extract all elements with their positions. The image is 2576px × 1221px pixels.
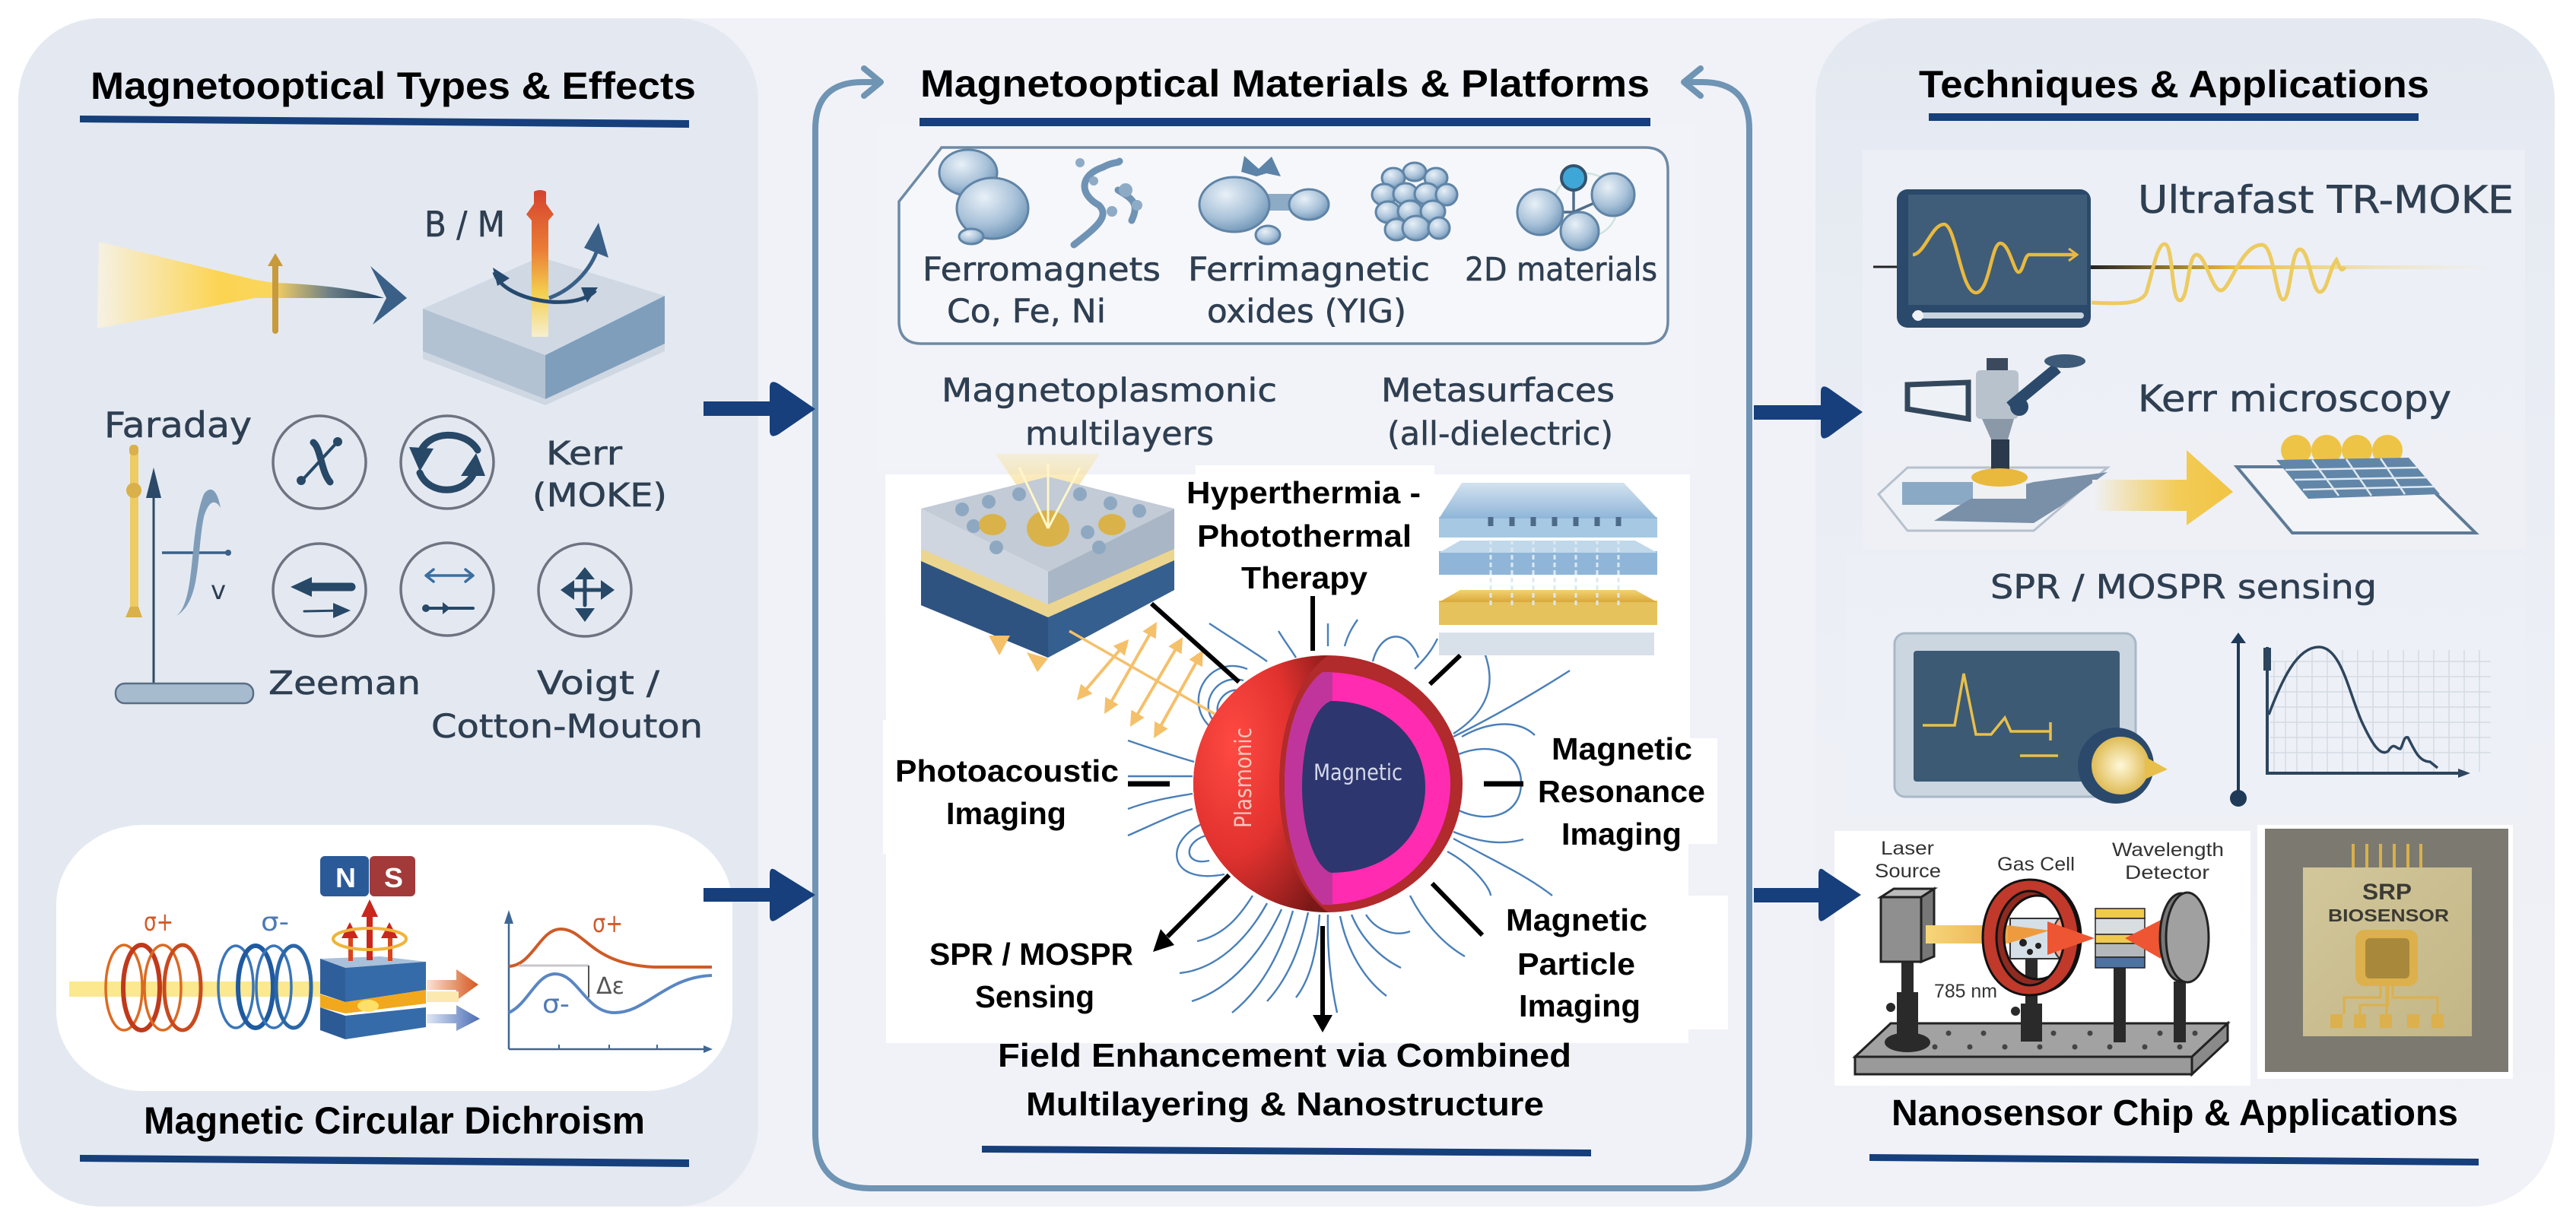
- label: sigma minus: σ-: [261, 907, 289, 937]
- arrow: types to materials top: [704, 382, 815, 436]
- icon: crossed X: [273, 416, 366, 509]
- laser source: [1881, 889, 1934, 962]
- label: Kerr microscopy: Kerr microscopy: [2138, 378, 2451, 420]
- arrow: types to materials bottom: [704, 869, 815, 921]
- label: Ultrafast TR-MOKE: Ultrafast TR-MOKE: [2138, 178, 2514, 222]
- label: photoacoustic: [895, 753, 1119, 831]
- label: magnetoplasmonic multilayers: [942, 372, 1277, 453]
- illustration: Kerr microscope: [1879, 354, 2107, 531]
- label: Kerr MOKE: Kerr: [546, 435, 622, 473]
- yellow rays: [996, 454, 1100, 532]
- label: photoacoustic: Imaging: [946, 796, 1066, 831]
- heading underline: [920, 118, 1650, 126]
- illustration: SPR monitor: [1895, 633, 2168, 804]
- magnetic core: [1302, 701, 1425, 873]
- label: Kerr MOKE: [532, 435, 667, 515]
- illustration: TR-MOKE monitor and pulse: [1873, 189, 2494, 328]
- label: magnetoplasmonic multilayers: Magnetoplasmonic: [942, 372, 1277, 410]
- coil: sigma minus: [218, 946, 311, 1028]
- label: MRI: [1538, 731, 1705, 852]
- icon: split arrows: [401, 543, 494, 636]
- setup labels: [1875, 838, 2224, 1002]
- chart: dichroism spectra: Δε: [596, 973, 624, 1000]
- icon: Zeeman arrows: [273, 544, 366, 636]
- icon: ferromagnet blobs: [939, 150, 1028, 244]
- label: hyperthermia: Photothermal: [1197, 519, 1412, 553]
- material labels: oxides (YIG): [1207, 293, 1406, 331]
- label: metasurfaces: Metasurfaces: [1381, 372, 1615, 410]
- plasmon field arrows: [989, 627, 1215, 733]
- illustration: Faraday: [104, 404, 253, 703]
- wavelength detector: [2095, 909, 2145, 968]
- magnet: N: [335, 862, 356, 893]
- illustration: Faraday: v: [211, 576, 226, 606]
- label: magnetoplasmonic multilayers: multilayers: [1025, 415, 1214, 453]
- setup labels: Wavelength: [2112, 839, 2224, 861]
- illustration: magnetized block: [423, 190, 665, 405]
- heading underline: [1869, 1154, 2479, 1166]
- arrow: materials to techniques bottom: [1754, 869, 1861, 921]
- icon: YIG cluster: [1372, 163, 1457, 240]
- label: SPR sensing: Sensing: [975, 979, 1094, 1014]
- label: sigma plus: σ+: [144, 907, 173, 937]
- material labels: 2D materials: [1465, 251, 1657, 289]
- heading: magnetic circular dichroism: Magnetic Circular Dichroism: [144, 1099, 645, 1142]
- setup labels: Laser: [1881, 838, 1934, 859]
- illustration: Kerr image on chip: [2237, 435, 2476, 533]
- connector lines: [1128, 596, 1523, 1032]
- core-shell sphere: [1193, 655, 1463, 912]
- heading underline: [1929, 113, 2419, 121]
- label: MRI: Magnetic: [1552, 731, 1692, 766]
- panel: techniques and applications: [1815, 18, 2555, 1207]
- box: material classes: [899, 147, 1668, 344]
- heading: nanosensor: Nanosensor Chip & Applications: [1892, 1093, 2458, 1134]
- label: Voigt Cotton-Mouton: Cotton-Mouton: [431, 708, 703, 746]
- chart: SPR curve: [2230, 633, 2491, 807]
- arrow: materials to techniques top: [1754, 386, 1863, 439]
- setup labels: Gas Cell: [1997, 854, 2075, 875]
- magnetic label: Magnetic: [1313, 760, 1402, 785]
- label: metasurfaces: (all-dielectric): [1387, 415, 1613, 453]
- material labels: [923, 251, 1657, 331]
- label: Voigt Cotton-Mouton: Voigt /: [537, 664, 660, 702]
- label: SPR sensing: SPR / MOSPR: [929, 937, 1133, 972]
- panel: materials and platforms frame: [815, 62, 1749, 1188]
- setup labels: Source: [1875, 861, 1941, 882]
- label: MRI: Imaging: [1561, 817, 1682, 852]
- setup labels: Detector: [2125, 862, 2209, 883]
- icon: ferrimagnetic oxide molecule: [1199, 156, 1329, 244]
- heading: types and effects: Magnetooptical Types & Effects: [91, 65, 696, 107]
- panel: core-shell nanoparticle diagram: [883, 454, 1728, 1043]
- illustration: SRP biosensor chip: [2257, 825, 2513, 1079]
- label: B/M: B / M: [424, 204, 505, 245]
- heading: techniques: Techniques & Applications: [1919, 63, 2429, 106]
- label: field enhancement: Multilayering & Nanostructure: [1026, 1086, 1544, 1123]
- illustration: magnetoplasmonic stack: [921, 454, 1174, 658]
- label: hyperthermia: Therapy: [1241, 560, 1367, 595]
- chip text: SRP: [2362, 880, 2412, 905]
- label: MPI: [1506, 902, 1647, 1023]
- icon: rotation arrows: [401, 416, 494, 509]
- gas cell: [1983, 880, 2081, 995]
- label: MPI: Imaging: [1519, 988, 1641, 1023]
- posts: [1885, 958, 2186, 1052]
- sample block: [320, 956, 426, 1039]
- white background: [883, 465, 1728, 1043]
- pink shell: [1285, 672, 1450, 905]
- label: MPI: Magnetic: [1506, 902, 1647, 937]
- lens disc: [2160, 893, 2209, 982]
- material labels: Ferromagnets: [923, 251, 1161, 289]
- label: SPR sensing: SPR / MOSPR sensing: [1990, 568, 2377, 607]
- illustration: polarized beam: [97, 242, 407, 334]
- label: MPI: Particle: [1517, 947, 1635, 982]
- sensor pad: [2330, 930, 2444, 1028]
- icon: 2D material network: [1517, 166, 1634, 250]
- optical table: [1855, 1023, 2228, 1074]
- label: Voigt Cotton-Mouton: [431, 664, 703, 746]
- setup labels: 785 nm: [1934, 981, 1997, 1002]
- label: field enhancement: [998, 1037, 1571, 1123]
- heading underline: [80, 116, 689, 128]
- heading: materials: Magnetooptical Materials & Platforms: [920, 62, 1650, 105]
- panel: magnetic circular dichroism illustration: [56, 825, 732, 1091]
- material labels: Ferrimagnetic: [1188, 251, 1430, 289]
- label: field enhancement: Field Enhancement via Combined: [998, 1037, 1571, 1074]
- illustration: SRP biosensor chip: BIOSENSOR: [2328, 905, 2449, 925]
- label: Zeeman: Zeeman: [268, 664, 421, 702]
- illustration: metasurface stack: [1439, 483, 1657, 655]
- arrow: yellow: [2092, 450, 2233, 525]
- coil: sigma plus: [106, 945, 201, 1030]
- label: metasurfaces: [1381, 372, 1615, 453]
- output arrows: [427, 969, 480, 1031]
- yellow light beam: [69, 982, 329, 997]
- magnet: [320, 856, 415, 896]
- material labels: Co, Fe, Ni: [947, 293, 1106, 331]
- chart: dichroism spectra: [504, 909, 713, 1053]
- plasmonic label: Plasmonic: [1231, 728, 1257, 828]
- label: Faraday: Faraday: [104, 404, 252, 446]
- icon: ferromagnet strands: [1074, 158, 1142, 245]
- heading underline: [80, 1155, 689, 1167]
- chart: dichroism spectra: σ-: [542, 989, 570, 1020]
- label: hyperthermia: Hyperthermia -: [1186, 475, 1421, 510]
- icon: four way arrows: [538, 544, 631, 636]
- panel: magnetooptical types and effects: [18, 18, 758, 1207]
- illustration: laser gas cell setup: [1834, 831, 2250, 1086]
- magnet: S: [384, 862, 403, 893]
- label: SPR sensing: [929, 937, 1133, 1014]
- chart: dichroism spectra: σ+: [592, 909, 623, 939]
- magnetization arrows: [333, 899, 406, 961]
- label: Kerr MOKE: (MOKE): [532, 477, 667, 515]
- label: MRI: Resonance: [1538, 774, 1705, 809]
- label: photoacoustic: Photoacoustic: [895, 753, 1119, 788]
- field lines: [1128, 620, 1570, 1013]
- label: hyperthermia: [1186, 475, 1421, 595]
- heading underline: [982, 1146, 1591, 1156]
